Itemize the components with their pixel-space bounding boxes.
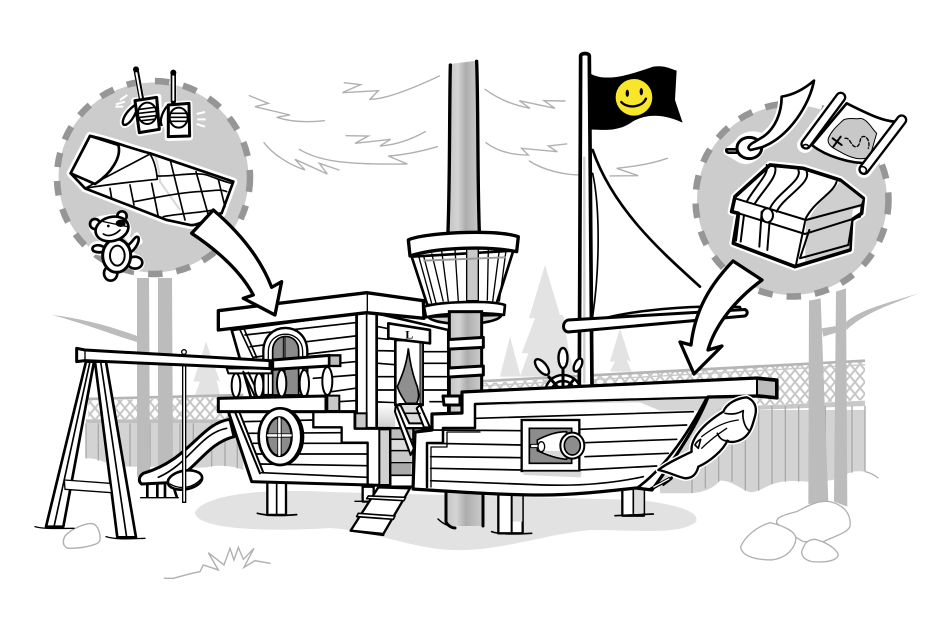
flag with smiley xyxy=(590,66,683,130)
leg feet xyxy=(35,527,145,539)
left A-frame leg xyxy=(46,362,94,527)
tree trunks, left xyxy=(52,278,173,477)
crow's nest base ring xyxy=(424,302,505,324)
icon: walkie talkies xyxy=(115,66,206,138)
icon group: walkie talkies, sleeping bag, teddy xyxy=(71,66,233,281)
circle background xyxy=(58,82,248,272)
backyard fence, left side xyxy=(86,395,243,470)
hull stepped trim xyxy=(427,396,757,487)
cabin wall, left xyxy=(232,313,357,412)
balcony rail and swing beam xyxy=(273,355,340,369)
rock under swing xyxy=(63,524,100,548)
swing cross bar xyxy=(64,480,112,493)
doorway with curtains xyxy=(395,340,423,405)
crow's nest rim xyxy=(408,232,518,256)
lower mast with rope rings xyxy=(442,312,483,413)
swing set xyxy=(35,350,234,539)
deck shadow beyond the bow xyxy=(700,396,757,415)
tree trunks, right xyxy=(808,288,918,507)
ground shadow under the ship xyxy=(195,491,697,550)
flag pole and rope xyxy=(579,53,700,387)
ship legs xyxy=(492,488,653,534)
rope ladder ramp xyxy=(351,487,410,535)
background pine trees xyxy=(193,265,632,395)
porthole xyxy=(259,408,303,465)
stairs xyxy=(390,428,413,487)
slide xyxy=(139,419,234,498)
balcony balusters xyxy=(227,367,332,397)
crow's nest xyxy=(408,232,518,324)
boom and furled sail xyxy=(564,307,747,332)
crow's nest basket xyxy=(412,248,513,305)
arched window xyxy=(263,328,307,395)
dashed circle ring xyxy=(696,104,888,296)
mast base below hull xyxy=(438,486,483,528)
right A-frame leg xyxy=(95,362,136,537)
wind scribbles in the sky xyxy=(249,76,667,176)
cabin and left hull xyxy=(218,293,448,515)
icon: sleeping bag xyxy=(71,136,233,225)
arrow: right circle to ship deck xyxy=(680,261,762,374)
panel: left supply circle xyxy=(57,66,250,281)
cabin wall, door side xyxy=(377,313,448,428)
back leg under cabin xyxy=(355,487,374,502)
cabin left leg xyxy=(257,480,297,515)
cannon xyxy=(522,420,584,477)
hull body xyxy=(413,378,777,495)
roof xyxy=(218,293,424,330)
main mast xyxy=(448,61,480,233)
panel: right treasure circle xyxy=(696,81,902,296)
rocks by right trees xyxy=(741,501,850,562)
pole xyxy=(579,53,592,387)
deck end cap xyxy=(757,379,776,397)
corner post xyxy=(357,313,377,429)
ship wheel xyxy=(532,348,584,411)
swing beam front xyxy=(77,348,270,369)
porch step and rails xyxy=(395,404,430,455)
tire swing rope and seat xyxy=(166,350,204,502)
door sign xyxy=(388,323,430,343)
hull shading and planks xyxy=(431,398,707,488)
icon: pirate teddy bear xyxy=(90,211,142,281)
icon: treasure map xyxy=(803,97,902,173)
arrow: left circle to cabin xyxy=(192,210,282,315)
door sign: L xyxy=(405,328,413,342)
grass tuft xyxy=(164,547,270,578)
icon group: sabre, map, chest xyxy=(726,81,902,267)
icon: sabre xyxy=(726,81,814,161)
right hull xyxy=(413,378,777,495)
icon: treasure chest xyxy=(732,165,863,267)
backyard fence, right side xyxy=(480,361,878,493)
left hull xyxy=(218,396,390,486)
small mast bracket xyxy=(443,396,460,405)
circle background xyxy=(697,105,887,295)
mermaid figurehead xyxy=(649,397,756,490)
dashed circle ring xyxy=(57,81,250,274)
